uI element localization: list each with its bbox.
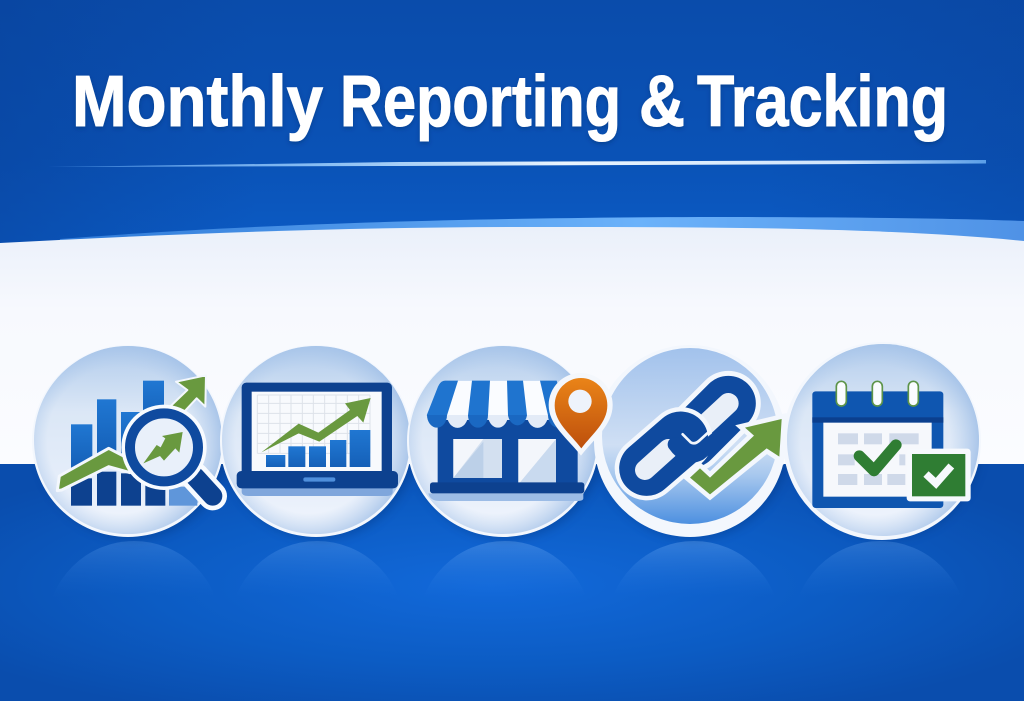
green arrow bbox=[261, 398, 371, 452]
bar chart bbox=[71, 381, 197, 506]
title: Reporting bbox=[340, 62, 621, 142]
striped awning bbox=[427, 381, 568, 428]
screen bars bbox=[266, 430, 370, 467]
bottom blue background bbox=[0, 460, 1024, 701]
green arrow bbox=[171, 375, 206, 413]
icon: orange location pin bbox=[549, 373, 613, 456]
title: Monthly bbox=[72, 62, 323, 142]
icon: magnifying glass bbox=[121, 405, 213, 496]
white wave panel bbox=[0, 227, 1024, 464]
green check badge bbox=[907, 449, 971, 501]
calendar binder rings bbox=[836, 381, 918, 406]
circle 2: laptop bbox=[220, 345, 412, 537]
circle reflections bbox=[47, 541, 967, 701]
green check bbox=[859, 445, 896, 471]
circle 1: analytics bbox=[32, 345, 224, 537]
title bbox=[72, 62, 948, 142]
screen grid bbox=[257, 395, 370, 453]
chain link front bbox=[645, 427, 732, 470]
light blue wave band bbox=[60, 217, 1024, 245]
laptop body bbox=[242, 383, 392, 479]
title underline bbox=[48, 160, 986, 167]
store base bbox=[428, 493, 583, 501]
store windows bbox=[453, 439, 556, 484]
calendar page bbox=[823, 423, 932, 497]
title: & bbox=[639, 62, 685, 142]
circle shadows bbox=[75, 464, 980, 543]
laptop screen bbox=[252, 392, 382, 471]
laptop shadow bbox=[242, 487, 393, 496]
circle 4: chain link bbox=[594, 345, 786, 537]
circle 3: storefront bbox=[407, 345, 599, 537]
top blue background bbox=[0, 0, 1024, 260]
title: Tracking bbox=[697, 62, 948, 142]
store body bbox=[438, 420, 578, 487]
chain link back bbox=[692, 403, 728, 440]
calendar body bbox=[812, 391, 943, 508]
date cells bbox=[838, 433, 919, 485]
circle 5: calendar bbox=[783, 342, 981, 540]
green check arrow bbox=[690, 419, 782, 494]
green trend line bbox=[57, 448, 130, 491]
